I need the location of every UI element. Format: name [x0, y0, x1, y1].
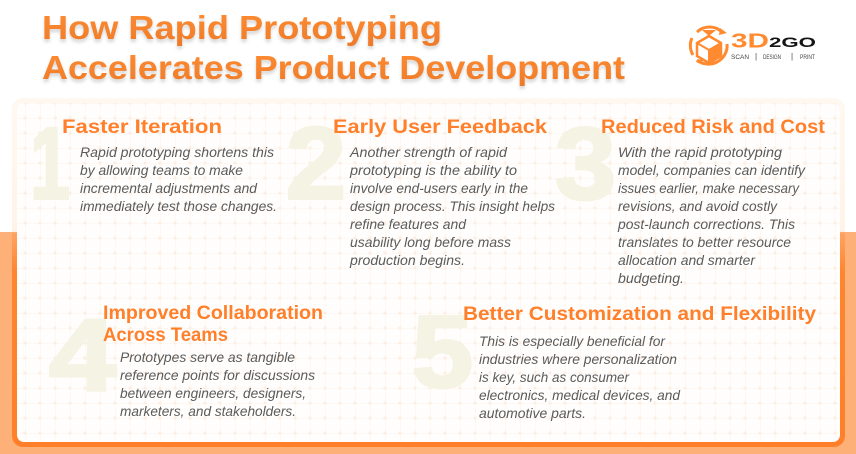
- heading 1: Faster Iteration: [62, 117, 222, 138]
- body 4: marketers, and stakeholders.: [120, 403, 296, 419]
- logo tagline: |: [755, 52, 757, 61]
- title: [42, 9, 625, 86]
- body 1: Rapid prototyping shortens this: [80, 144, 274, 160]
- item 2: early user feedback: [286, 106, 555, 268]
- body 5: automotive parts.: [479, 405, 586, 421]
- body 3: allocation and smarter: [618, 252, 756, 268]
- number 1: 1: [30, 106, 70, 220]
- heading 2: Early User Feedback: [333, 117, 547, 138]
- heading 4: Improved Collaboration: [103, 303, 323, 324]
- item 1: faster iteration: [30, 106, 277, 220]
- body 2: refine features and: [350, 216, 467, 232]
- body 3: revisions, and avoid costly: [618, 198, 778, 214]
- body 4: Prototypes serve as tangible: [120, 349, 295, 365]
- heading 4: [103, 303, 323, 346]
- number 3: 3: [555, 107, 616, 221]
- heading 4: Across Teams: [103, 325, 228, 346]
- body 1: incremental adjustments and: [80, 180, 258, 196]
- logo tagline: [731, 52, 815, 61]
- body 4: between engineers, designers,: [120, 385, 306, 401]
- body 4: [120, 349, 315, 419]
- body 5: electronics, medical devices, and: [479, 387, 681, 403]
- item 5: better customization: [412, 295, 816, 421]
- body 2: prototyping is the ability to: [349, 162, 517, 178]
- body 3: model, companies can identify: [618, 162, 806, 178]
- body 2: design process. This insight helps: [350, 198, 555, 214]
- body 5: industries where personalization: [479, 351, 677, 367]
- body 5: [479, 333, 681, 421]
- orange background band: [0, 232, 856, 454]
- number 5: 5: [412, 295, 473, 409]
- heading 5: Better Customization and Flexibility: [463, 304, 816, 325]
- body 2: production begins.: [349, 252, 465, 268]
- body 3: budgeting.: [618, 270, 684, 286]
- body 4: reference points for discussions: [120, 367, 315, 383]
- logo: 3D2GO: [690, 27, 816, 65]
- logo tagline: DESIGN: [763, 54, 781, 61]
- body 3: issues earlier, make necessary: [618, 180, 800, 196]
- title: Accelerates Product Development: [42, 49, 625, 86]
- body 2: [349, 144, 555, 268]
- logo wordmark: 2GO: [769, 35, 816, 50]
- logo wordmark: [731, 30, 816, 52]
- body 3: translates to better resource: [618, 234, 791, 250]
- logo tagline: SCAN: [731, 54, 749, 61]
- main panel: [12, 98, 845, 447]
- body 1: immediately test those changes.: [80, 198, 277, 214]
- body 2: usability long before mass: [350, 234, 511, 250]
- logo tagline: |: [791, 52, 793, 61]
- body 2: involve end-users early in the: [350, 180, 528, 196]
- heading 3: Reduced Risk and Cost: [601, 117, 826, 138]
- number 2: 2: [286, 106, 346, 220]
- title: How Rapid Prototyping: [42, 9, 442, 46]
- number 4: 4: [49, 298, 116, 412]
- body 1: [80, 144, 277, 214]
- item 4: improved collaboration: [49, 298, 323, 419]
- body 3: With the rapid prototyping: [618, 144, 782, 160]
- body 2: Another strength of rapid: [349, 144, 508, 160]
- body 5: This is especially beneficial for: [479, 333, 666, 349]
- body 3: [617, 144, 806, 286]
- body 1: by allowing teams to make: [80, 162, 243, 178]
- item 3: reduced risk and cost: [555, 107, 826, 286]
- body 3: post-launch corrections. This: [617, 216, 795, 232]
- logo wordmark: 3D: [731, 30, 769, 52]
- logo tagline: PRINT: [800, 54, 815, 61]
- body 5: is key, such as consumer: [479, 369, 630, 385]
- icon: cube with circular arrows: [690, 27, 727, 65]
